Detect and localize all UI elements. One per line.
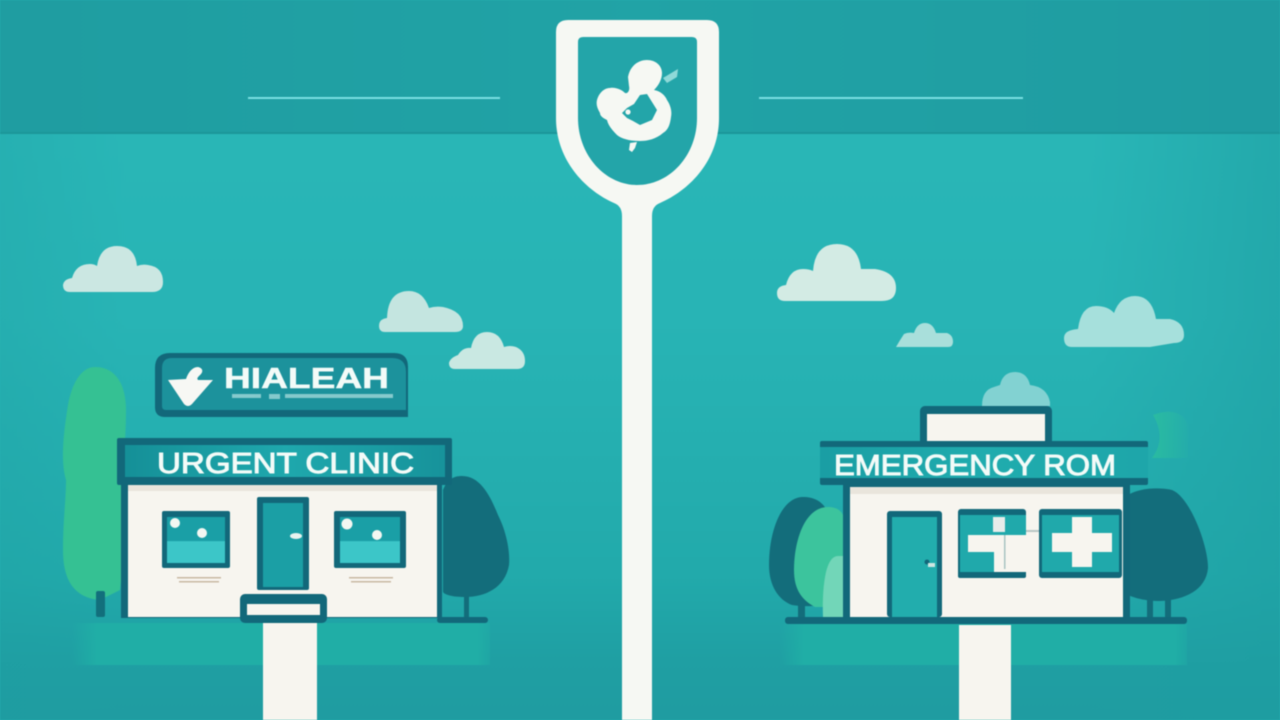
header band xyxy=(0,0,1280,134)
dark tree xyxy=(443,476,509,618)
emergency room scene xyxy=(769,406,1208,720)
sign small print xyxy=(232,394,393,399)
cloud: left 2 xyxy=(379,291,463,332)
right dark tree xyxy=(1128,488,1208,619)
logo dot xyxy=(625,109,631,115)
left window xyxy=(162,511,230,568)
right window sill xyxy=(349,577,393,582)
door xyxy=(887,511,942,617)
awning label: EMERGENCY ROM xyxy=(834,450,1116,482)
grass strip xyxy=(780,624,1187,665)
cloud: right 4 behind building xyxy=(982,372,1050,406)
light green shrub xyxy=(823,556,845,617)
cloud: left 3 xyxy=(449,332,525,369)
central signpost xyxy=(556,20,719,720)
roof box xyxy=(920,406,1052,446)
faint back tree xyxy=(1152,412,1188,458)
right window xyxy=(334,511,406,568)
logo hole xyxy=(622,94,657,125)
awning xyxy=(117,438,452,485)
ground line xyxy=(785,617,1187,624)
sign pole xyxy=(622,190,652,720)
header line left xyxy=(248,97,500,99)
front step xyxy=(240,594,327,623)
medical cross xyxy=(1052,517,1112,567)
mid green tree xyxy=(794,507,845,607)
cloud: right 2 xyxy=(896,323,953,347)
cross window xyxy=(1039,509,1122,578)
logo leaf xyxy=(663,69,678,83)
grass strip xyxy=(72,623,490,665)
logo mark xyxy=(597,60,678,152)
ground line xyxy=(437,617,488,623)
building body xyxy=(121,478,442,618)
awning xyxy=(820,441,1148,485)
cloud: right 3 xyxy=(1064,296,1184,347)
left dark tree xyxy=(769,497,832,618)
sign name: HIALEAH xyxy=(224,363,389,395)
left window sill xyxy=(177,577,221,582)
door xyxy=(257,497,309,590)
cloud: left 1 xyxy=(63,246,163,292)
walkway xyxy=(263,623,317,720)
shield inner xyxy=(578,37,697,185)
green tree xyxy=(63,367,126,600)
middle window xyxy=(958,509,1040,578)
building body xyxy=(843,480,1130,618)
arrow icon xyxy=(168,367,213,406)
shield outline xyxy=(556,20,719,216)
cloud: right 1 xyxy=(777,244,896,301)
header line right xyxy=(759,97,1023,99)
urgent clinic scene xyxy=(63,353,509,720)
awning label: URGENT CLINIC xyxy=(157,448,414,480)
walkway xyxy=(959,625,1011,720)
Hialeah sign xyxy=(155,353,408,417)
logo tail xyxy=(629,142,637,152)
small post xyxy=(96,591,105,617)
